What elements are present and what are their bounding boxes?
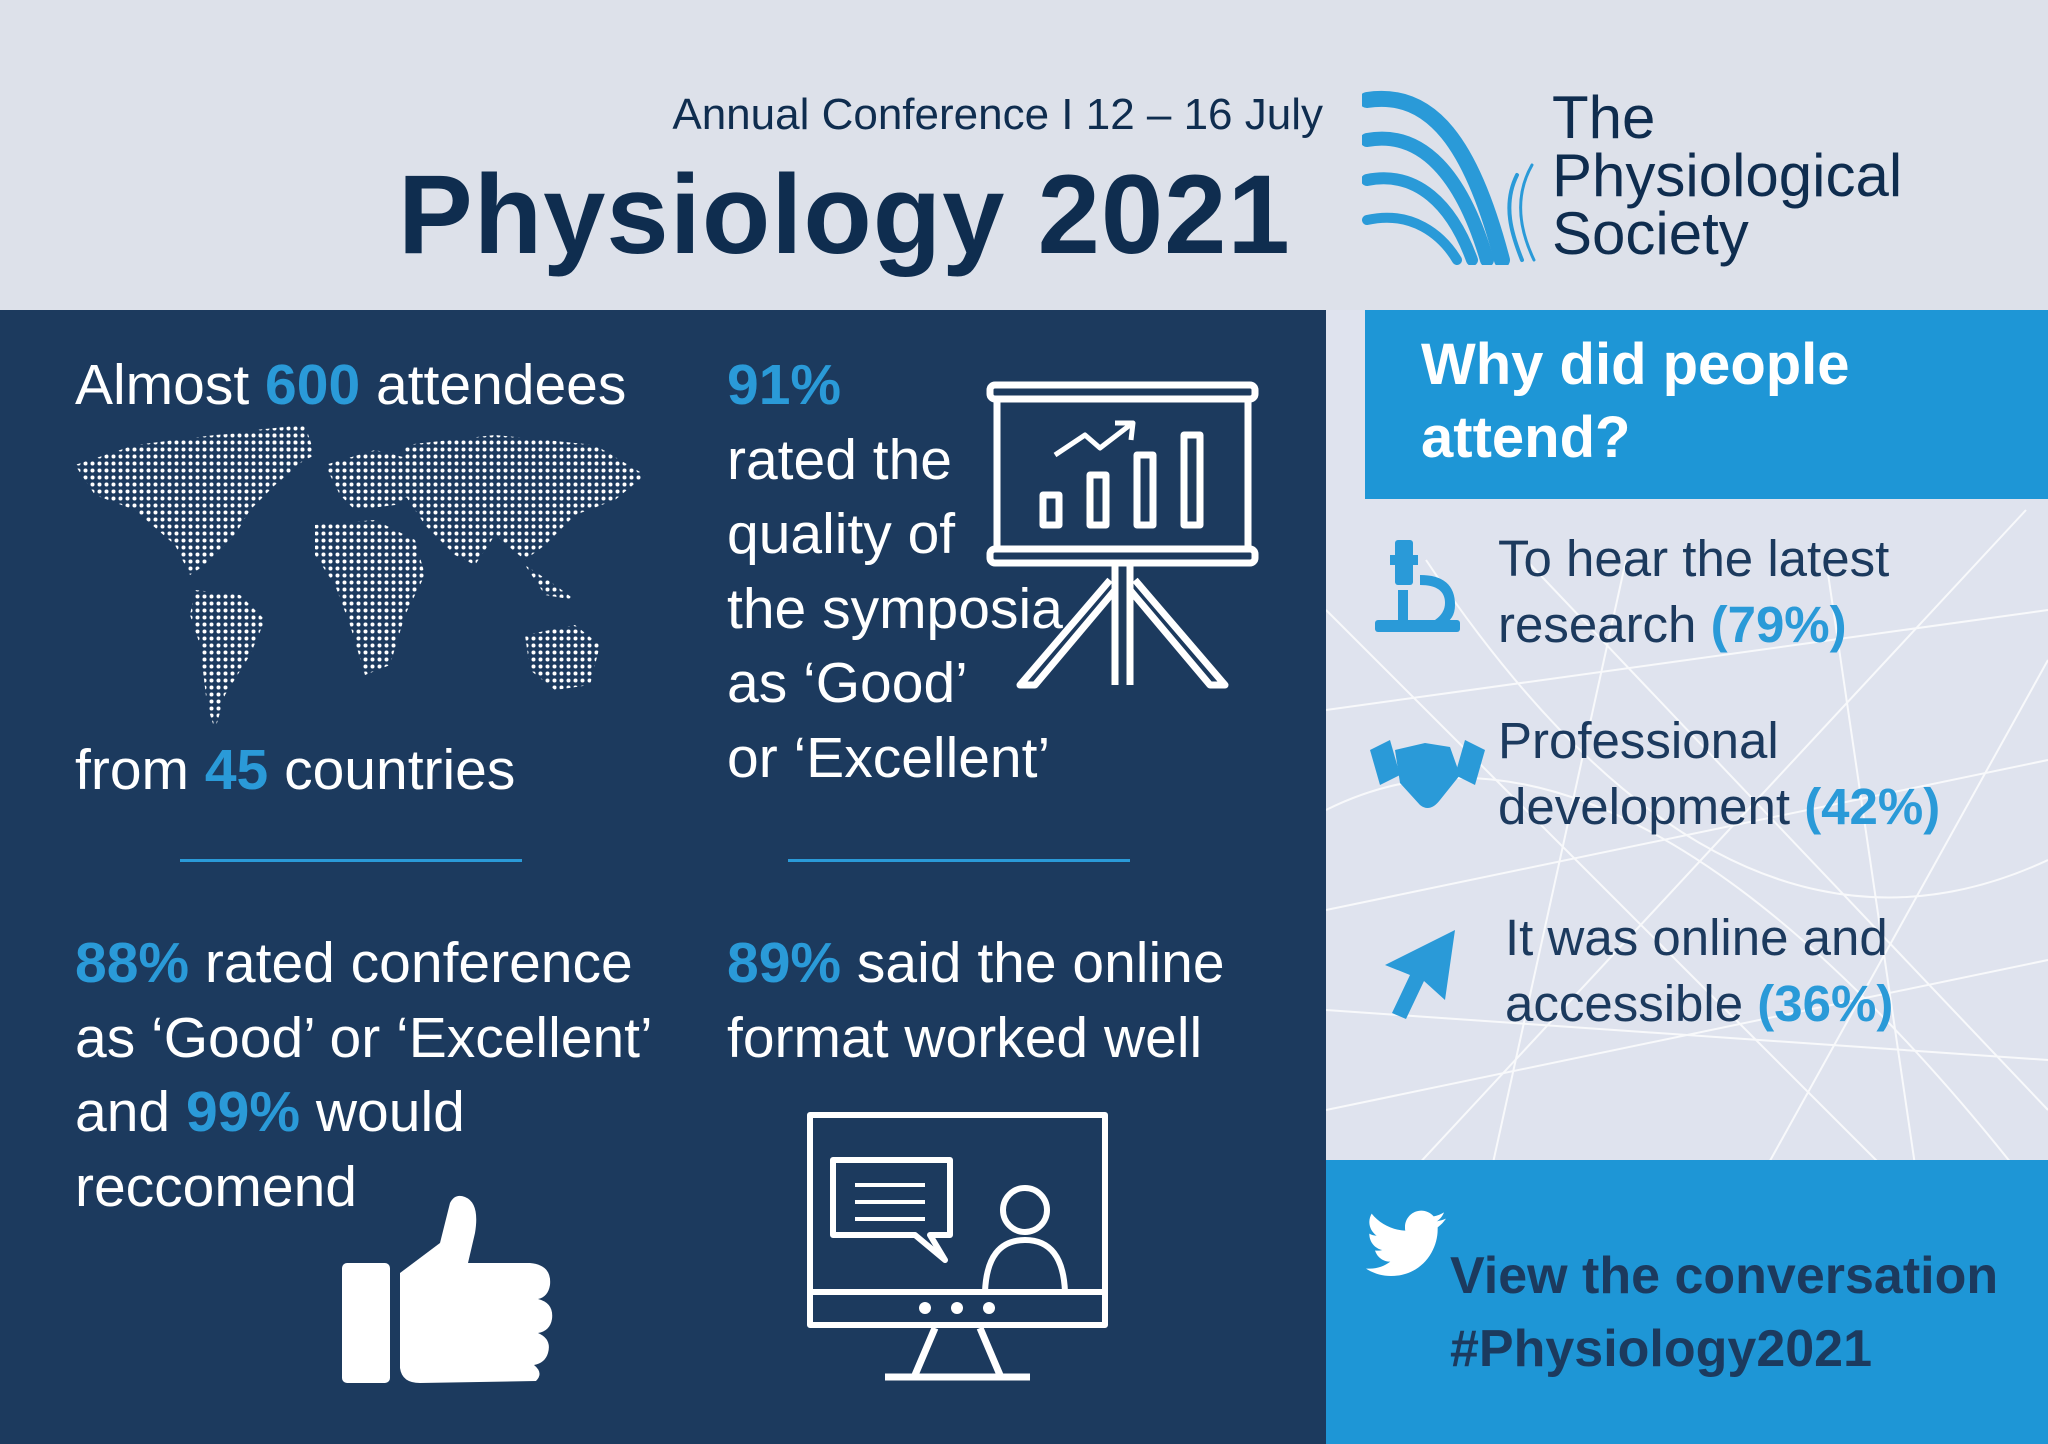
twitter text	[1450, 1247, 1998, 1378]
stat: conference rating: as ‘Good’ or ‘Excellent’	[75, 1006, 653, 1070]
stat: conference rating: 88% rated conference	[75, 931, 633, 995]
panel: why did people attend heading	[1365, 310, 2048, 499]
stat: symposia: as ‘Good’	[727, 651, 968, 715]
stat: symposia: 91%	[727, 353, 841, 417]
stat: conference rating: reccomend	[75, 1154, 357, 1218]
stat: conference rating: and 99% would	[75, 1080, 465, 1144]
icon: monitor with video call	[807, 1112, 1108, 1380]
logo waves	[1362, 90, 1536, 265]
panel: twitter	[1326, 1160, 2048, 1444]
stat: symposia: the symposia	[727, 576, 1063, 640]
divider left	[180, 859, 522, 862]
stat: symposia: or ‘Excellent’	[727, 726, 1050, 790]
icon: presentation easel	[986, 382, 1258, 688]
stat: countries: from 45 countries	[75, 738, 515, 802]
panel: why did people attend heading: attend?	[1421, 405, 1630, 470]
icon: microscope	[1375, 540, 1460, 632]
dark navy panel	[0, 310, 1326, 1444]
divider middle	[788, 859, 1130, 862]
reason: online and accessible: It was online and	[1505, 909, 1888, 966]
header band	[0, 0, 2048, 310]
icon: handshake	[1370, 740, 1485, 808]
panel: why did people attend heading: Why did people	[1421, 332, 1850, 397]
logo text: Society	[1552, 200, 1749, 267]
title: Physiology 2021	[398, 152, 1291, 277]
twitter text: #Physiology2021	[1450, 1320, 1872, 1378]
reason: online and accessible: accessible (36%)	[1505, 975, 1893, 1032]
reason: professional development: development (42%)	[1498, 778, 1940, 835]
stat: conference rating	[75, 931, 653, 1218]
subtitle: Annual Conference I 12 – 16 July	[672, 90, 1323, 139]
stat: online format	[727, 931, 1225, 1070]
logo	[1362, 84, 1902, 267]
stat: symposia	[727, 353, 1063, 790]
stat: online format: 89% said the online	[727, 931, 1225, 995]
stat: symposia: quality of	[727, 502, 955, 566]
logo text	[1552, 84, 1902, 267]
stat: online format: format worked well	[727, 1006, 1202, 1070]
icon: thumbs up	[342, 1196, 552, 1383]
logo text: The	[1552, 84, 1655, 151]
reason: latest research: To hear the latest	[1498, 530, 1889, 587]
logo text: Physiological	[1552, 142, 1902, 209]
reason: latest research	[1498, 530, 1889, 653]
reason: latest research: research (79%)	[1498, 596, 1847, 653]
icon: twitter bird	[1366, 1210, 1446, 1276]
stat: attendees: Almost 600 attendees	[75, 353, 626, 417]
world map	[76, 426, 644, 724]
reason: professional development	[1498, 712, 1940, 835]
stat: symposia: rated the	[727, 428, 952, 492]
icon: cursor arrow	[1385, 930, 1455, 1019]
right panel background	[1326, 510, 2048, 1160]
twitter text: View the conversation	[1450, 1247, 1998, 1305]
reason: online and accessible	[1505, 909, 1893, 1032]
reason: professional development: Professional	[1498, 712, 1779, 769]
